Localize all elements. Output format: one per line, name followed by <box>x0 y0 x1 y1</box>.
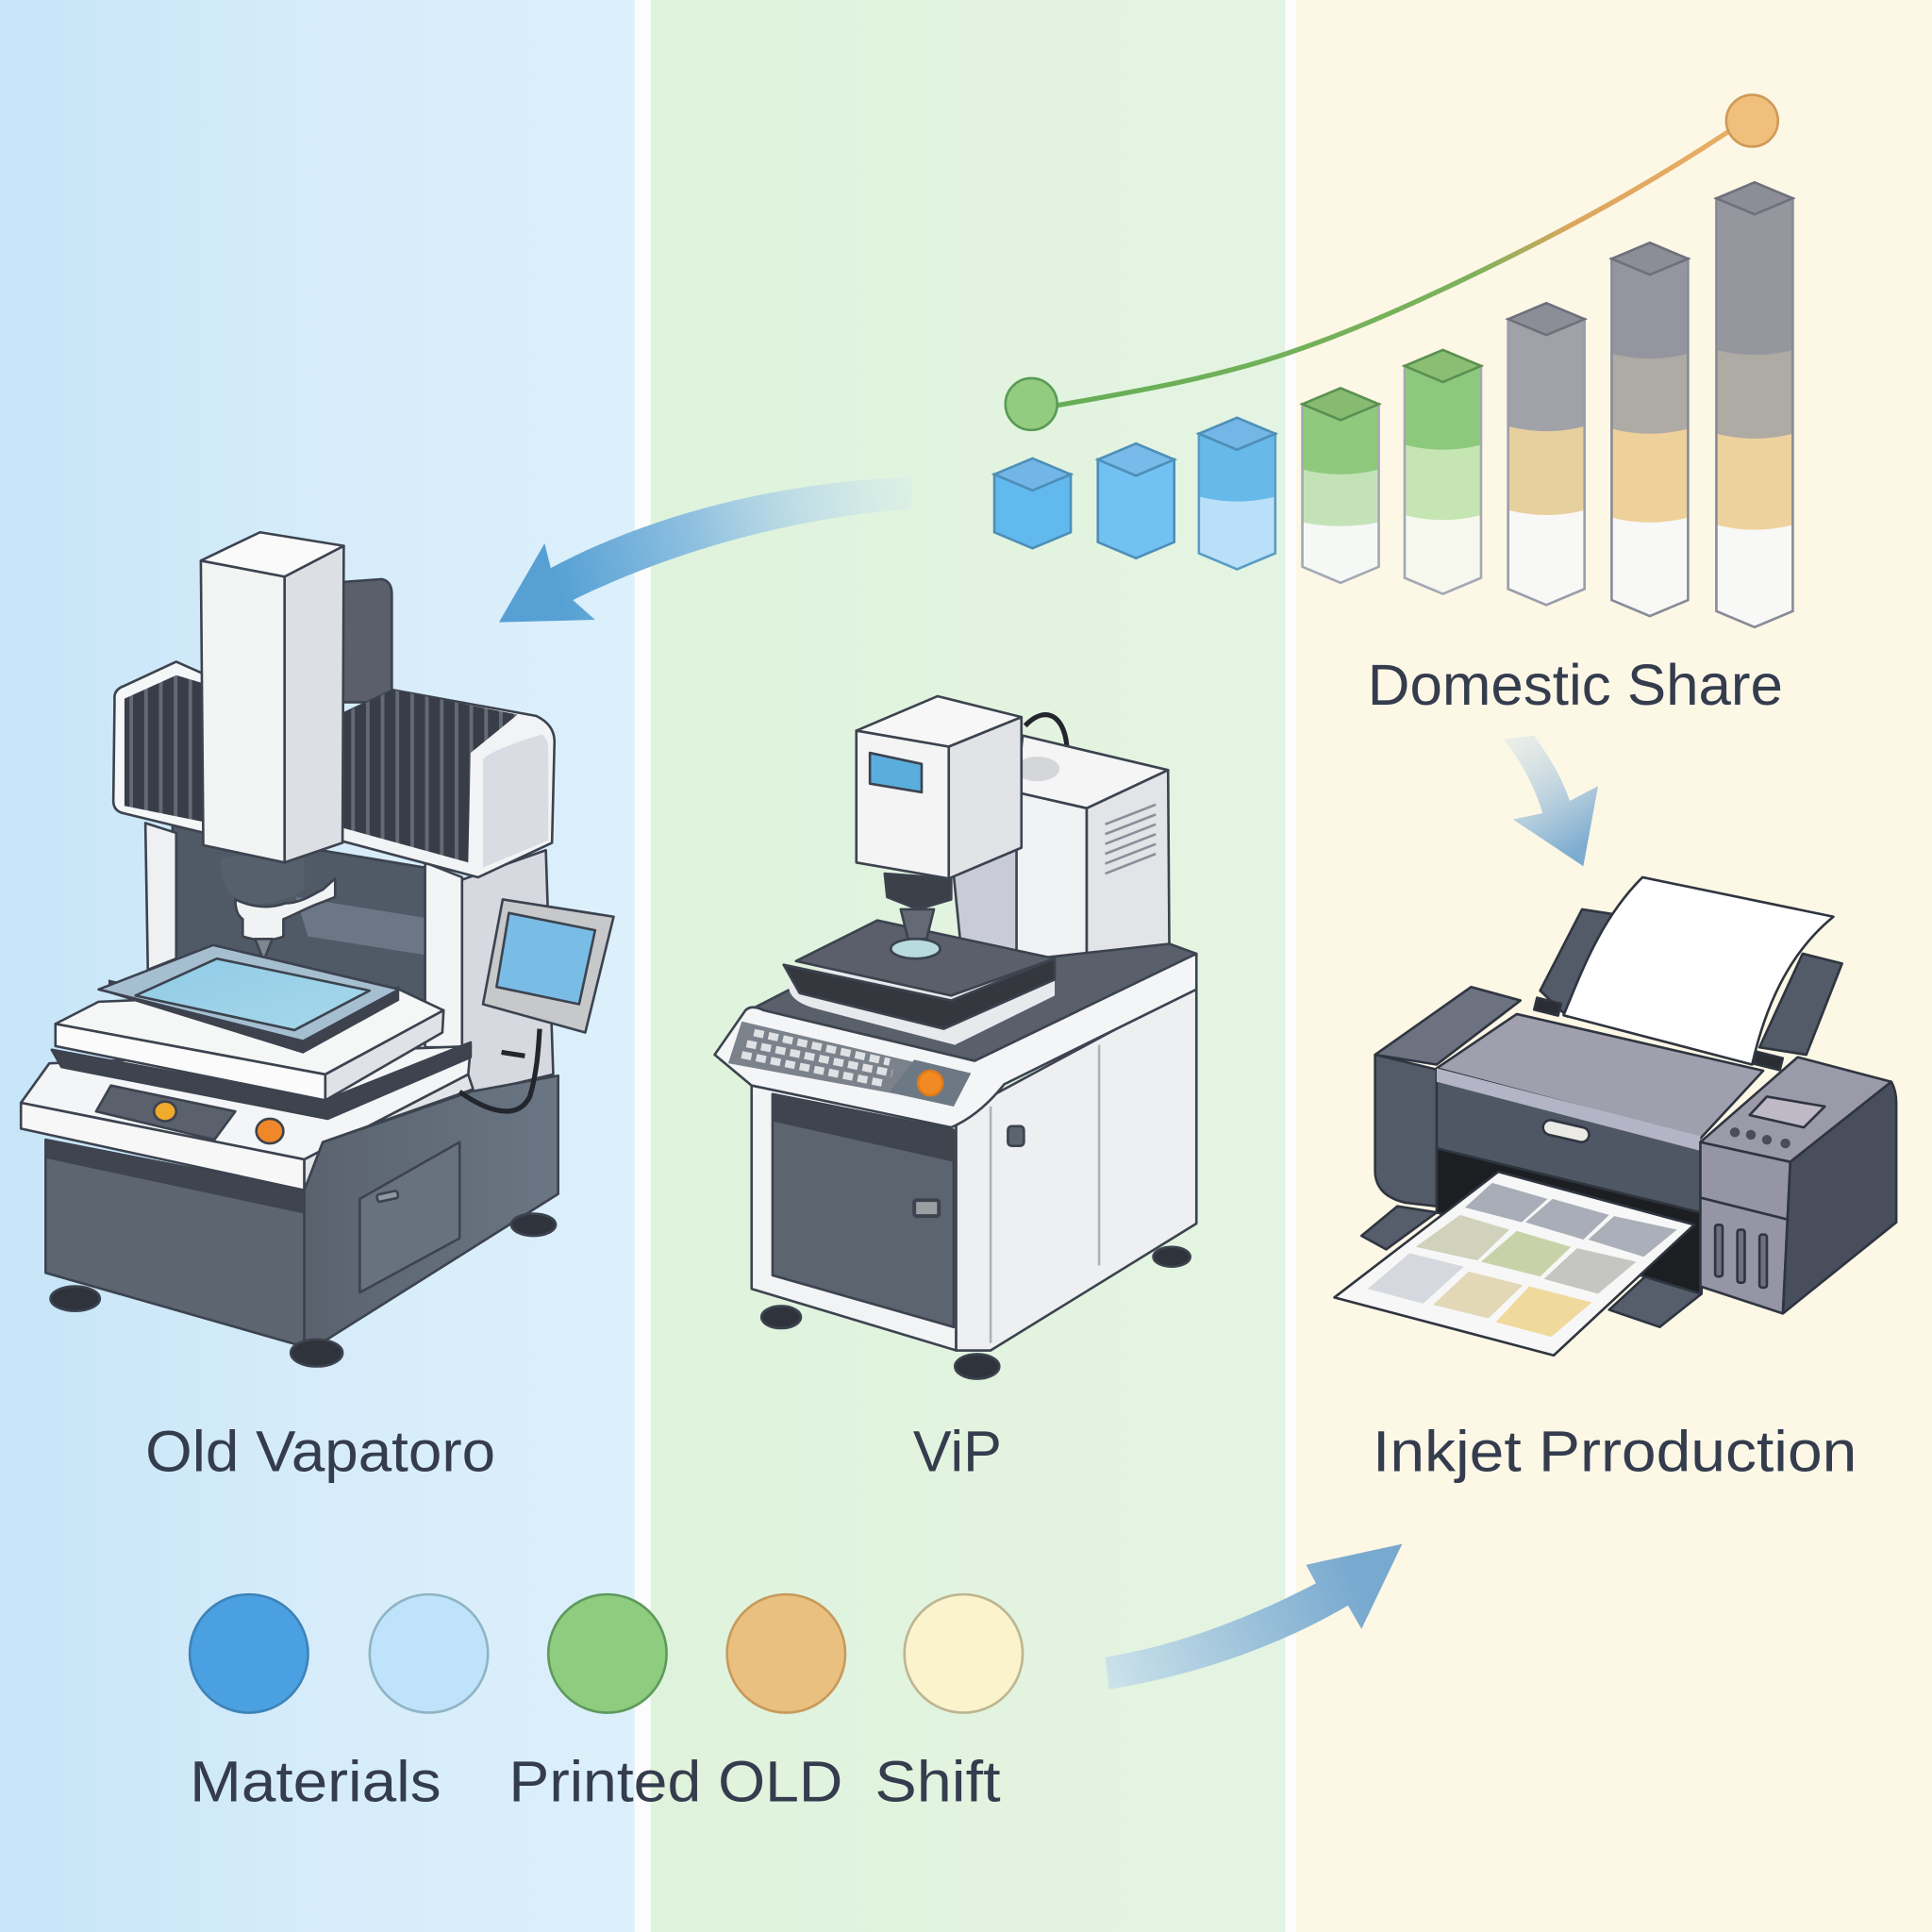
trend line with end markers <box>1006 95 1778 430</box>
arrow: share to printer <box>1503 736 1598 866</box>
output sheet <box>1335 1172 1694 1356</box>
paper <box>1563 877 1834 1064</box>
arrow: chart to old machine <box>499 476 912 623</box>
nozzle <box>885 874 951 958</box>
rear tower <box>333 579 391 702</box>
process head <box>857 696 1022 878</box>
paper slot <box>1437 1148 1700 1293</box>
machine: inkjet printer <box>1335 877 1896 1356</box>
left beam <box>113 661 209 834</box>
feet <box>761 1247 1191 1379</box>
legend label: shift: Shift <box>874 1750 1001 1815</box>
worktop <box>749 943 1196 1072</box>
gantry interior <box>173 825 431 1004</box>
bar 7 <box>1611 242 1688 620</box>
panel: green column <box>651 0 1285 1932</box>
bar 6 <box>1508 303 1585 610</box>
plate ring <box>789 949 1055 1045</box>
right block <box>1700 1058 1896 1313</box>
front face <box>1437 1074 1700 1212</box>
center top <box>1437 1014 1763 1139</box>
bar 3 <box>1199 418 1275 573</box>
base front <box>21 1103 305 1191</box>
spindle <box>221 850 335 961</box>
cabinet <box>45 1075 558 1347</box>
legend label: printed old: Printed OLD <box>508 1750 842 1815</box>
label: vip: ViP <box>913 1420 1002 1485</box>
cable <box>459 1029 540 1111</box>
bar 4 <box>1303 388 1379 585</box>
cabinet <box>752 986 1196 1351</box>
substrate frame and glass <box>98 945 399 1054</box>
bar 5 <box>1405 350 1481 597</box>
monitor <box>483 899 613 1033</box>
dark gap under table <box>52 1042 471 1119</box>
base top <box>21 1046 471 1159</box>
legend label: materials: Materials <box>190 1750 441 1815</box>
left leg <box>145 823 176 970</box>
panel: yellow column <box>1296 0 1932 1932</box>
bar 1 <box>994 458 1071 548</box>
right beam <box>325 690 555 877</box>
cable <box>1025 715 1067 761</box>
body left <box>1375 987 1521 1207</box>
table plate <box>56 990 443 1100</box>
main column <box>201 532 343 862</box>
bar chart: domestic share <box>994 182 1792 629</box>
bar 2 <box>1098 443 1174 558</box>
rear column <box>951 825 1023 961</box>
paper hinges <box>1534 998 1783 1070</box>
control panel <box>96 1086 283 1143</box>
label: domestic share: Domestic Share <box>1368 653 1783 718</box>
arrow: legend to printer <box>1106 1544 1402 1690</box>
output tray <box>1361 1207 1702 1327</box>
panel: blue column <box>0 0 635 1932</box>
machine: old vapatoro <box>21 532 613 1366</box>
door handle <box>1541 1119 1591 1143</box>
label: old vapatoro: Old Vapatoro <box>145 1420 495 1485</box>
stage platform <box>784 921 1055 1029</box>
label: inkjet production: Inkjet Prroduction <box>1373 1420 1857 1485</box>
bar 8 <box>1716 182 1792 629</box>
power box <box>1015 736 1170 990</box>
rear paper supports <box>1541 909 1842 1055</box>
machine: vip <box>715 696 1196 1379</box>
lip with keyboard <box>715 954 1196 1127</box>
feet <box>51 1214 556 1366</box>
legend swatches <box>190 1594 1023 1713</box>
right leg <box>425 862 462 1047</box>
